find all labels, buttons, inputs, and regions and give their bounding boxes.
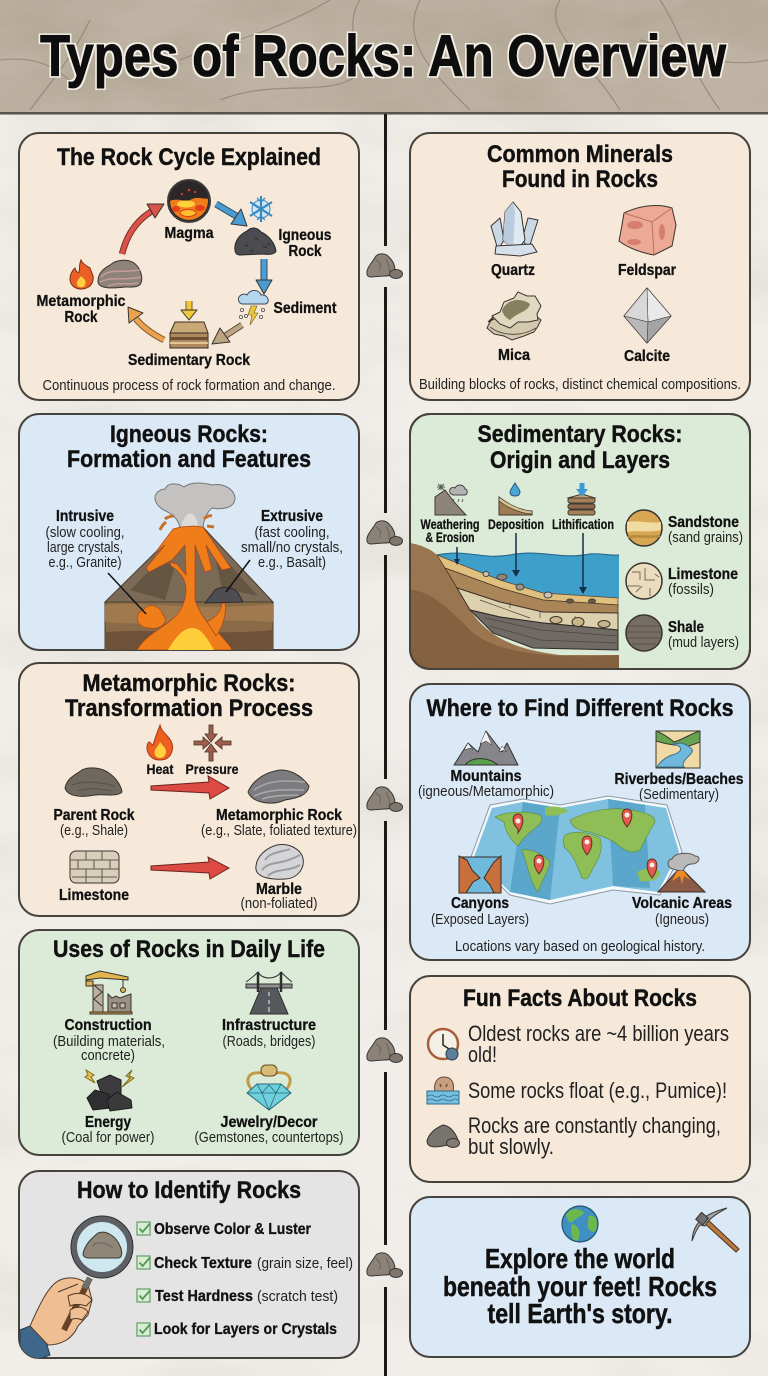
label: riverbeds: (Sedimentary) bbox=[639, 786, 719, 803]
icon: weathering bbox=[435, 484, 467, 515]
icon: globe bbox=[562, 1206, 599, 1243]
label: parent rock: Parent Rock bbox=[54, 807, 135, 824]
panel: rock cycle bbox=[19, 133, 359, 400]
panel: uses of rocks bbox=[19, 930, 359, 1155]
closing text: beneath your feet! Rocks bbox=[443, 1271, 717, 1302]
label: volcanic areas: Volcanic Areas bbox=[632, 895, 732, 912]
label: shale bbox=[668, 619, 739, 651]
pointer lines bbox=[108, 560, 250, 614]
arrow: sedimentary to metamorphic bbox=[128, 307, 164, 340]
label: igneous rock bbox=[278, 227, 332, 260]
icon: mountains bbox=[454, 731, 518, 765]
illustration: volcano bbox=[105, 483, 273, 650]
checklist: hardness: Test Hardness bbox=[155, 1288, 253, 1305]
heading: common minerals: Found in Rocks bbox=[502, 166, 658, 193]
arrow: parent to metamorphic bbox=[151, 776, 229, 799]
arrow: sediment to sedimentary bbox=[212, 325, 242, 344]
label: sediment: Sediment bbox=[274, 300, 337, 317]
panel: fun facts bbox=[410, 976, 750, 1182]
panel: metamorphic rocks bbox=[19, 663, 359, 916]
header banner bbox=[0, 0, 768, 114]
label: metamorphic rock bbox=[201, 807, 357, 839]
label: mountains: Mountains bbox=[450, 768, 522, 785]
icon: quartz bbox=[491, 202, 538, 256]
heading: igneous rocks: Formation and Features bbox=[67, 446, 311, 473]
icon: sandstone bbox=[626, 510, 662, 546]
icon: clock bbox=[428, 1029, 458, 1060]
icon: pumice floating bbox=[427, 1077, 459, 1104]
label: riverbeds: Riverbeds/Beaches bbox=[614, 771, 744, 788]
label: extrusive: small/no crystals, bbox=[241, 539, 343, 556]
arrow: limestone to marble bbox=[151, 857, 229, 879]
label: intrusive: e.g., Granite) bbox=[48, 554, 122, 571]
label: sandstone: (sand grains) bbox=[668, 529, 743, 546]
label: intrusive: large crystals, bbox=[47, 539, 123, 556]
label: intrusive bbox=[46, 508, 124, 571]
icon: jewelry gem bbox=[247, 1065, 291, 1110]
label: igneous rock: Rock bbox=[288, 243, 322, 260]
central timeline with rocks bbox=[367, 114, 402, 1376]
label: mountains: (igneous/Metamorphic) bbox=[418, 783, 554, 800]
heading: igneous rocks: Igneous Rocks: bbox=[110, 421, 268, 448]
heading: rock cycle: The Rock Cycle Explained bbox=[57, 144, 321, 171]
arrow: metamorphic to magma bbox=[122, 204, 164, 254]
label: canyons: (Exposed Layers) bbox=[431, 911, 529, 928]
label: infrastructure bbox=[222, 1017, 316, 1050]
heading: common minerals bbox=[487, 141, 673, 193]
heading: sedimentary rocks: Origin and Layers bbox=[490, 447, 670, 474]
label: riverbeds bbox=[614, 771, 744, 803]
icon: heat flame bbox=[147, 725, 173, 760]
caption: locations: Locations vary based on geological history. bbox=[455, 938, 705, 955]
label: heat: Heat bbox=[146, 761, 174, 777]
heading: sedimentary rocks bbox=[478, 421, 682, 474]
illustration: hand with magnifier bbox=[20, 1216, 133, 1362]
icon: pressure arrows bbox=[194, 725, 231, 761]
icon: pickaxe bbox=[692, 1208, 739, 1252]
label: mica: Mica bbox=[498, 347, 530, 364]
label: construction: (Building materials, bbox=[53, 1033, 165, 1050]
label: parent rock: (e.g., Shale) bbox=[60, 822, 128, 839]
label: jewelry bbox=[194, 1114, 344, 1146]
label: shale: Shale bbox=[668, 619, 704, 636]
closing text: Explore the world bbox=[485, 1243, 675, 1274]
label: limestone: (fossils) bbox=[668, 581, 714, 598]
label: metamorphic rock: Rock bbox=[64, 309, 98, 326]
label: marble: Marble bbox=[256, 881, 302, 898]
panel: sedimentary rocks bbox=[410, 414, 750, 669]
label: mountains bbox=[418, 768, 554, 800]
heading: sedimentary rocks: Sedimentary Rocks: bbox=[478, 421, 682, 448]
icon: energy coal bbox=[85, 1070, 134, 1111]
label: quartz: Quartz bbox=[491, 262, 535, 279]
heading: metamorphic rocks: Metamorphic Rocks: bbox=[82, 670, 296, 697]
icon: deposition bbox=[499, 483, 532, 515]
checklist: texture bbox=[137, 1255, 353, 1272]
label: magma: Magma bbox=[164, 225, 214, 242]
label: marble bbox=[240, 881, 318, 912]
label: sedimentary rock: Sedimentary Rock bbox=[128, 352, 250, 369]
label: jewelry: (Gemstones, countertops) bbox=[194, 1129, 344, 1146]
label: extrusive bbox=[241, 508, 343, 571]
icon: sedimentary strata bbox=[170, 322, 208, 348]
icon: igneous rock bbox=[235, 228, 276, 255]
label: intrusive: (slow cooling, bbox=[46, 524, 124, 541]
panel: igneous rocks bbox=[19, 414, 359, 650]
icon: magma bbox=[168, 180, 210, 222]
icon: infrastructure bridge bbox=[246, 972, 292, 1014]
heading: identify: How to Identify Rocks bbox=[77, 1177, 301, 1204]
fact: oldest rocks line 2: old! bbox=[468, 1042, 497, 1067]
arrow: magma to igneous bbox=[216, 204, 247, 226]
icon: parent rock bbox=[65, 768, 122, 796]
illustration: world map bbox=[471, 796, 682, 904]
label: sandstone bbox=[668, 514, 743, 546]
icon: construction crane bbox=[86, 971, 132, 1014]
label: extrusive: (fast cooling, bbox=[254, 524, 330, 541]
heading: metamorphic rocks bbox=[65, 670, 313, 722]
icon: marble bbox=[256, 845, 303, 879]
icon: mica bbox=[487, 292, 541, 340]
panel: closing message bbox=[410, 1197, 750, 1357]
checklist: texture: Check Texture bbox=[154, 1255, 252, 1272]
icon: metamorphic slate bbox=[248, 770, 309, 803]
icon: lithification bbox=[568, 483, 595, 515]
icon: limestone blocks bbox=[70, 851, 119, 883]
arrow: deposition bbox=[181, 301, 197, 320]
label: weathering: Weathering bbox=[420, 516, 480, 532]
label: deposition: Deposition bbox=[488, 516, 544, 532]
label: energy bbox=[62, 1114, 154, 1146]
icon: riverbed bbox=[656, 731, 700, 768]
label: limestone: Limestone bbox=[668, 566, 738, 583]
heading: where to find: Where to Find Different Rocks bbox=[426, 695, 734, 722]
panel: common minerals bbox=[410, 133, 750, 400]
panel border over scene bbox=[410, 414, 750, 669]
heading: common minerals: Common Minerals bbox=[487, 141, 673, 168]
checklist: hardness bbox=[137, 1288, 338, 1305]
label: limestone: Limestone bbox=[59, 887, 129, 904]
label: energy: (Coal for power) bbox=[62, 1129, 154, 1146]
label: limestone bbox=[668, 566, 738, 598]
label: sandstone: Sandstone bbox=[668, 514, 739, 531]
label: metamorphic rock: Metamorphic Rock bbox=[216, 807, 342, 824]
label: volcanic areas bbox=[632, 895, 732, 928]
label: pressure: Pressure bbox=[186, 761, 239, 777]
label: infrastructure: Infrastructure bbox=[222, 1017, 316, 1034]
heading: metamorphic rocks: Transformation Process bbox=[65, 695, 313, 722]
label: intrusive: Intrusive bbox=[56, 508, 114, 525]
checklist: observe: Observe Color & Luster bbox=[154, 1221, 311, 1238]
label: metamorphic rock: Metamorphic bbox=[36, 293, 126, 310]
label: extrusive: Extrusive bbox=[261, 508, 323, 525]
label: weathering: & Erosion bbox=[426, 529, 474, 545]
icon: snowflake bbox=[250, 196, 272, 222]
label: lithification: Lithification bbox=[552, 516, 614, 532]
closing text bbox=[443, 1243, 717, 1329]
label: jewelry: Jewelry/Decor bbox=[220, 1114, 318, 1131]
label: extrusive: e.g., Basalt) bbox=[258, 554, 326, 571]
label: weathering bbox=[420, 516, 480, 545]
closing text: tell Earth's story. bbox=[488, 1298, 672, 1329]
panel: where to find rocks bbox=[410, 684, 750, 960]
icon: sediment cloud bbox=[238, 290, 268, 325]
label: canyons: Canyons bbox=[451, 895, 509, 912]
checklist: layers: Look for Layers or Crystals bbox=[154, 1321, 337, 1338]
label: volcanic areas: (Igneous) bbox=[655, 911, 709, 928]
checklist: texture: (grain size, feel) bbox=[257, 1255, 353, 1272]
icon: calcite bbox=[624, 288, 671, 343]
checklist: hardness: (scratch test) bbox=[257, 1288, 338, 1305]
icon: canyon bbox=[459, 856, 501, 893]
heading: uses: Uses of Rocks in Daily Life bbox=[53, 936, 325, 963]
fact: changing: Rocks are constantly changing, bbox=[468, 1113, 721, 1138]
label: calcite: Calcite bbox=[624, 348, 670, 365]
label: energy: Energy bbox=[85, 1114, 131, 1131]
label: infrastructure: (Roads, bridges) bbox=[222, 1033, 316, 1050]
illustration: sediment cross-section bbox=[410, 533, 619, 669]
icon: rock bbox=[427, 1125, 460, 1148]
caption: rock cycle: Continuous process of rock formation and change. bbox=[42, 377, 336, 394]
panel: how to identify bbox=[19, 1171, 359, 1362]
label: parent rock bbox=[54, 807, 135, 839]
label: shale: (mud layers) bbox=[668, 634, 739, 651]
icon: shale bbox=[626, 615, 662, 651]
label: metamorphic rock bbox=[36, 293, 126, 326]
heading: fun facts: Fun Facts About Rocks bbox=[463, 985, 697, 1012]
label: construction: concrete) bbox=[81, 1047, 135, 1064]
icon: volcano bbox=[658, 853, 705, 892]
label: feldspar: Feldspar bbox=[618, 262, 676, 279]
heading: igneous rocks bbox=[67, 421, 311, 473]
label: metamorphic rock: (e.g., Slate, foliated texture) bbox=[201, 822, 357, 839]
label: canyons bbox=[431, 895, 529, 928]
arrow: igneous to sediment bbox=[256, 259, 272, 294]
label: igneous rock: Igneous bbox=[278, 227, 332, 244]
icon: limestone bbox=[626, 563, 662, 599]
lava flows and conduit bbox=[137, 526, 232, 650]
label: marble: (non-foliated) bbox=[240, 895, 318, 912]
icon: metamorphic rock bbox=[98, 260, 142, 288]
icon: feldspar bbox=[619, 205, 676, 255]
label: construction: Construction bbox=[64, 1017, 152, 1034]
fact: changing line 2: but slowly. bbox=[468, 1134, 554, 1159]
label: construction bbox=[53, 1017, 165, 1064]
icon: flame bbox=[70, 260, 93, 289]
